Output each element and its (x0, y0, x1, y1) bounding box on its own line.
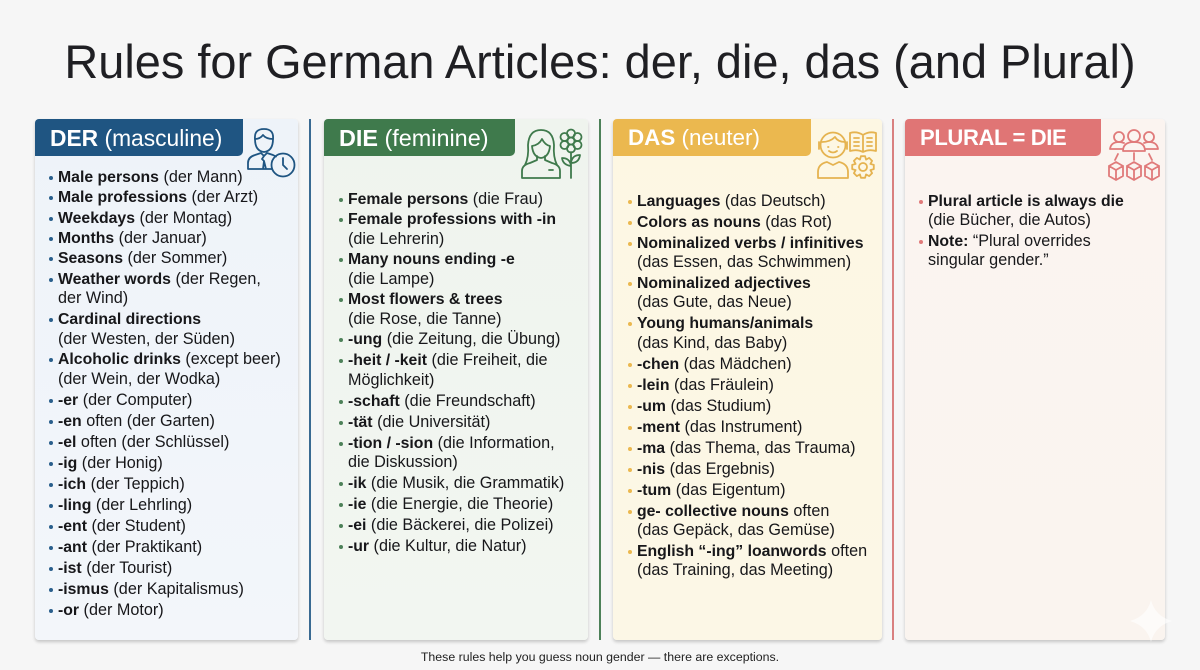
heading: DER: DER (masculine) (50, 125, 222, 151)
list: DAS rules (628, 192, 867, 579)
heading: PLURAL: PLURAL = DIE (920, 125, 1066, 150)
list: DIE rules: -tion / -sion (die Information, (348, 434, 555, 452)
icon: woman with flower (521, 128, 582, 179)
list: PLURAL rules: (die Bücher, die Autos) (928, 211, 1091, 229)
list: DER rules: -ist (der Tourist) (58, 559, 172, 577)
list: DIE rules: Most flowers & trees (348, 291, 502, 308)
list: PLURAL rules: Note: “Plural overrides (928, 232, 1091, 250)
list: DAS rules: (das Gepäck, das Gemüse) (637, 521, 835, 539)
list: DAS rules: -ment (das Instrument) (637, 418, 802, 436)
list: DAS rules: Nominalized adjectives (637, 275, 811, 292)
list: DIE rules: (die Lehrerin) (348, 230, 444, 248)
heading: DAS (613, 119, 811, 156)
list: DER rules: Cardinal directions (58, 311, 201, 328)
panel: PLURAL (905, 119, 1165, 640)
list: DER rules: -en often (der Garten) (58, 412, 215, 430)
list: DAS rules: Nominalized verbs / infinitives (637, 235, 863, 252)
title: Rules for German Articles: der, die, das (and Plural) (64, 36, 1136, 88)
list: DAS rules: -tum (das Eigentum) (637, 481, 785, 499)
list: DER rules: Weather words (der Regen, (58, 270, 261, 288)
footer note: These rules help you guess noun gender — there are exceptions. (421, 650, 779, 664)
list: DAS rules: Colors as nouns (das Rot) (637, 213, 832, 231)
list: DAS rules: -ma (das Thema, das Trauma) (637, 439, 856, 457)
heading: DER (35, 119, 243, 156)
list: DAS rules: English “-ing” loanwords often (637, 542, 867, 560)
list: DIE rules: (die Rose, die Tanne) (348, 310, 502, 328)
list: DER rules: -ig (der Honig) (58, 454, 163, 472)
heading: DIE (324, 119, 515, 156)
list: DER rules: (der Westen, der Süden) (58, 330, 235, 348)
list: DER rules: Seasons (der Sommer) (58, 249, 227, 267)
list: DER rules: -el often (der Schlüssel) (58, 433, 229, 451)
list: DER rules: der Wind) (58, 289, 128, 307)
list: DIE rules: -ei (die Bäckerei, die Polizei) (348, 516, 554, 534)
list: DAS rules: -lein (das Fräulein) (637, 376, 774, 394)
panel: DER masculine (35, 119, 298, 640)
list: DIE rules: -ung (die Zeitung, die Übung) (348, 330, 560, 348)
list: DER rules: Months (der Januar) (58, 229, 207, 247)
list: DER rules: Weekdays (der Montag) (58, 209, 232, 227)
list: DER rules: -ismus (der Kapitalismus) (58, 580, 244, 598)
list: DIE rules: -heit / -keit (die Freiheit, die (348, 351, 548, 369)
list: DAS rules: (das Training, das Meeting) (637, 561, 833, 579)
list: DAS rules: (das Kind, das Baby) (637, 334, 787, 352)
list: DER rules: -ent (der Student) (58, 517, 186, 535)
list: DAS rules: -chen (das Mädchen) (637, 355, 792, 373)
list: DER rules: Alcoholic drinks (except beer) (58, 350, 281, 368)
list: DAS rules: Young humans/animals (637, 315, 813, 332)
list: DER rules: Male persons (der Mann) (58, 168, 243, 186)
list: DER rules: -ant (der Praktikant) (58, 538, 202, 556)
list: DIE rules: -ur (die Kultur, die Natur) (348, 537, 527, 555)
list: DIE rules: Female persons (die Frau) (348, 190, 543, 208)
list: PLURAL rules: singular gender.” (928, 251, 1049, 269)
list: PLURAL rules (919, 193, 1124, 269)
divider: blue (309, 119, 311, 640)
list: DIE rules: Many nouns ending -e (348, 251, 515, 268)
list: DER rules (49, 168, 281, 619)
list: DAS rules: -um (das Studium) (637, 397, 771, 415)
heading: DIE: DIE (feminine) (339, 125, 488, 151)
heading: PLURAL (905, 119, 1101, 156)
list: DER rules: Male professions (der Arzt) (58, 188, 258, 206)
list: DIE rules (339, 190, 564, 555)
list: DER rules: -ich (der Teppich) (58, 475, 185, 493)
list: DIE rules: Möglichkeit) (348, 371, 434, 389)
list: DAS rules: -nis (das Ergebnis) (637, 460, 775, 478)
list: DIE rules: (die Lampe) (348, 270, 434, 288)
panel: DAS neuter (613, 119, 882, 640)
list: DAS rules: ge- collective nouns often (637, 502, 829, 520)
list: DER rules: -ling (der Lehrling) (58, 496, 192, 514)
list: DER rules: -er (der Computer) (58, 391, 192, 409)
icon: child, book and gear (817, 131, 877, 179)
heading: DAS: DAS (neuter) (628, 125, 760, 150)
list: DIE rules: die Diskussion) (348, 453, 458, 471)
list: DER rules: (der Wein, der Wodka) (58, 370, 220, 388)
list: DIE rules: -tät (die Universität) (348, 413, 490, 431)
list: DAS rules: (das Gute, das Neue) (637, 293, 792, 311)
list: DAS rules: (das Essen, das Schwimmen) (637, 253, 851, 271)
icon: man with clock (247, 128, 296, 178)
list: DIE rules: -ik (die Musik, die Grammatik) (348, 474, 564, 492)
list: DIE rules: Female professions with -in (348, 211, 556, 228)
icon: sparkle (1132, 602, 1167, 642)
list: PLURAL rules: Plural article is always die (928, 193, 1124, 210)
panel: DIE feminine (324, 119, 588, 640)
icon: people and boxes (1108, 129, 1160, 181)
divider: green (599, 119, 601, 640)
list: DIE rules: -schaft (die Freundschaft) (348, 392, 536, 410)
list: DAS rules: Languages (das Deutsch) (637, 192, 826, 210)
divider: red (892, 119, 894, 640)
list: DER rules: -or (der Motor) (58, 601, 164, 619)
list: DIE rules: -ie (die Energie, die Theorie) (348, 495, 553, 513)
